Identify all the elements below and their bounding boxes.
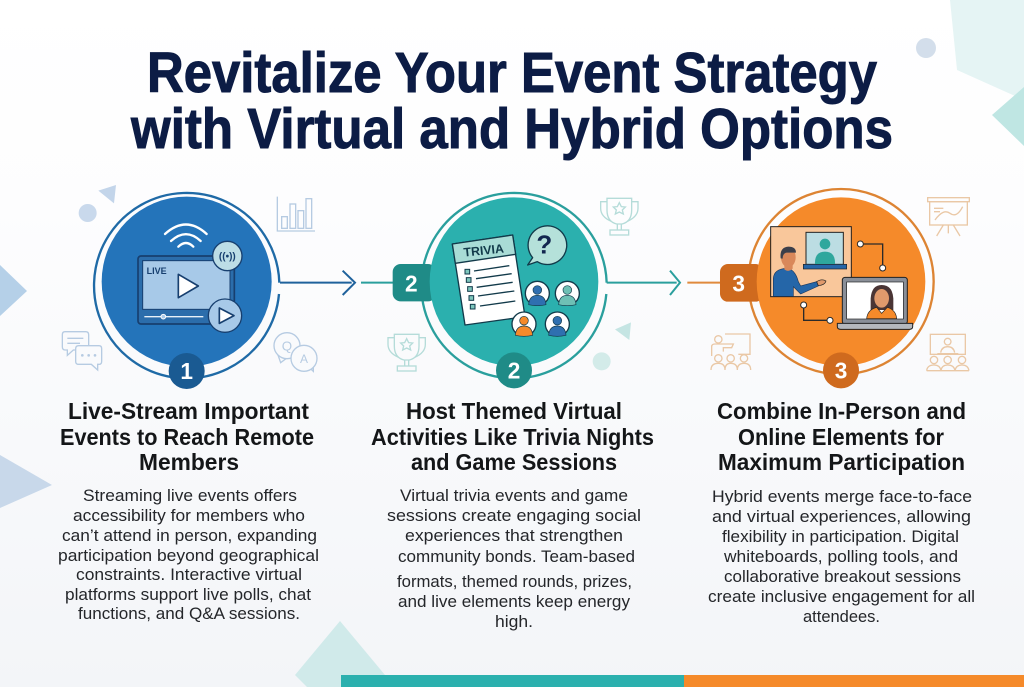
column 2 body text: formats, themed rounds, prizes, [397,572,632,591]
column 2 body text: high. [495,612,533,631]
column 2 body text: community bonds. Team-based [398,547,635,566]
step badge 3 [823,352,859,388]
arrow to step 2 [280,271,355,295]
column 3 body text: Hybrid events merge face-to-face [712,487,972,506]
icon: Q and A bubbles [274,333,317,371]
column 3 body text: whiteboards, polling tools, and [723,547,958,566]
outer ring [748,189,934,374]
title: Revitalize Your Event Strategy [147,41,877,105]
column 2 body text: and live elements keep energy [398,592,630,611]
column 1 body text: accessibility for members who [73,506,305,525]
side badge 2: 2 [405,270,418,296]
step badge 2 [496,352,532,388]
icon: trivia checklist: TRIVIA [463,241,505,260]
icon: bar chart [277,197,315,231]
column 3 body text: create inclusive engagement for all [708,587,975,606]
column 3 heading [717,398,966,475]
column 1 heading: Events to Reach Remote [60,424,314,450]
column 2 body text [387,486,641,631]
icon: trophy top right [601,198,638,235]
column 3 heading: Combine In-Person and [717,398,966,424]
icon: trophy bottom left [388,334,425,371]
icon: live video monitor: ((•)) [219,252,236,263]
column 3 body text [708,487,975,626]
column 3 body text: flexibility in participation. Digital [722,527,959,546]
column 2 body text: sessions create engaging social [387,506,641,525]
column 2 body text: Virtual trivia events and game [400,486,628,505]
icon: Q and A bubbles: A [300,352,308,366]
icon: classroom presenter [711,334,751,370]
icon: question bubble: ? [536,229,552,259]
step badge 1: 1 [180,358,193,384]
blue disc [102,197,272,367]
outer ring [94,193,279,378]
column 2 heading: Activities Like Trivia Nights [371,424,654,450]
column 1 body text: platforms support live polls, chat [65,585,311,604]
column 2 heading [371,398,654,475]
decorative circle and triangle [79,185,116,222]
column 1 body text: constraints. Interactive virtual [76,565,302,584]
column 3 body text: collaborative breakout sessions [724,567,961,586]
column 2 heading: and Game Sessions [411,449,617,475]
icon: trivia checklist [452,235,525,325]
column 1 heading: Live-Stream Important [68,398,309,424]
column 2 heading: Host Themed Virtual [406,398,622,424]
side badge 3 [720,264,763,302]
icon: wifi signal [165,224,207,247]
column 1 body text: Streaming live events offers [83,486,297,505]
column 1 heading: Members [139,449,239,475]
icon: presentation board [928,198,969,236]
side badge 2 [393,264,436,301]
column 1 body text: functions, and Q&A sessions. [78,604,300,623]
step badge 1 [169,353,205,389]
column 1 body text: can’t attend in person, expanding [62,526,317,545]
title [130,41,893,161]
side badge 3: 3 [732,270,745,296]
teal disc [430,197,598,366]
connector into step 2 [361,280,393,286]
column 3 heading: Online Elements for [738,424,944,450]
column 1 heading [60,398,314,475]
icon: participant avatars [512,281,579,336]
column 1 body text [58,486,319,623]
icon: question bubble [528,226,567,265]
icon: chat bubbles [62,332,102,370]
step badge 3: 3 [835,357,847,383]
bottom colour bar [341,675,1024,687]
online participant laptop [837,277,913,329]
in-person presenter panel [771,227,851,297]
outer ring [421,193,607,378]
decorative triangle and circle [593,322,631,370]
column 2 body text: experiences that strengthen [405,526,623,545]
icon: Q and A bubbles: Q [282,338,292,353]
panel: live stream illustration [62,185,355,389]
column 1 body text: participation beyond geographical [58,546,319,565]
icon: live video monitor [138,241,242,332]
connector lines [804,244,883,320]
panel: hybrid illustration [687,189,969,388]
connector into step 3 [687,280,721,286]
step badge 2: 2 [508,357,520,383]
icon: live video monitor: LIVE [147,266,167,276]
orange disc [757,197,925,366]
panel: trivia illustration [361,193,680,388]
column 3 heading: Maximum Participation [718,449,965,475]
icon: audience and screen [927,334,969,371]
column 3 body text: attendees. [803,607,880,626]
title: with Virtual and Hybrid Options [130,97,893,161]
column 3 body text: and virtual experiences, allowing [712,507,971,526]
arrow to step 3 [607,271,680,295]
connector dots [801,241,886,323]
